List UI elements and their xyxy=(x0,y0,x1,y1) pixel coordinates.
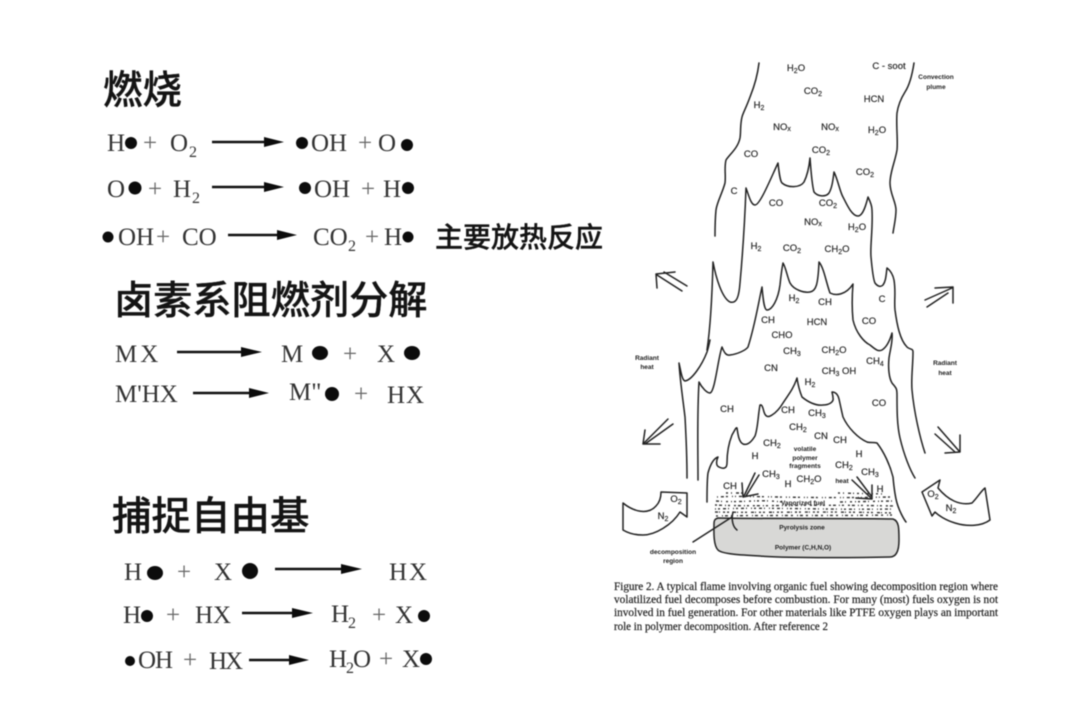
flame species labels: C - soot xyxy=(872,61,906,72)
flame species labels: H xyxy=(868,125,875,136)
heading: radical capture: 捕捉自由基 xyxy=(112,495,310,539)
equation: OH + CO: OH xyxy=(118,224,154,251)
flame species labels: 2 xyxy=(835,350,839,357)
flame annotations: Convection xyxy=(918,74,954,81)
figure caption: role in polymer decomposition. After reference 2 xyxy=(614,621,828,633)
flame species labels: 3 xyxy=(797,351,801,358)
flame species labels: HCN xyxy=(807,317,827,328)
flame species labels: CH xyxy=(762,469,776,480)
equation: MX xyxy=(115,341,420,368)
equation: H + HX: + xyxy=(166,602,180,629)
panel: radical capture xyxy=(112,495,432,677)
equation: OH + CO: H xyxy=(384,224,402,251)
flame species labels: 2 xyxy=(797,248,801,255)
flame species labels: CH xyxy=(808,408,822,419)
panel: halogen flame retardant decomposition xyxy=(114,280,428,409)
flame species labels: H xyxy=(785,479,792,490)
equation: M'HX: M" xyxy=(289,379,321,406)
equation: OH + HX xyxy=(125,646,432,677)
equation: OH + CO: 2 xyxy=(348,238,356,255)
equation: H + O2: + xyxy=(358,130,372,157)
flame annotations: polymer xyxy=(792,455,818,462)
flame annotations: 2 xyxy=(935,494,939,501)
equation: O + H2: + xyxy=(361,176,375,203)
flame species labels: NO xyxy=(804,217,818,228)
flame annotations: Radiant xyxy=(933,360,958,367)
equation: H + O2: + xyxy=(143,130,157,157)
equation: OH + HX: HX xyxy=(209,648,243,675)
flame species labels: 2 xyxy=(818,91,822,98)
flame species labels: 3 xyxy=(822,413,826,420)
flame annotations: Radiant xyxy=(635,355,660,362)
equation: MX: X xyxy=(377,341,395,368)
equation: OH + HX: X xyxy=(402,646,420,673)
flame species labels: 4 xyxy=(880,361,884,368)
flame species labels: CH xyxy=(833,435,847,446)
flame species labels: CO xyxy=(819,198,833,209)
flame species labels: CH xyxy=(822,366,835,377)
flame species labels: H xyxy=(789,293,795,304)
equation: OH + HX: OH xyxy=(138,647,173,674)
flame species labels: O xyxy=(842,244,850,255)
flame annotations: N xyxy=(946,503,952,514)
flame species labels: O xyxy=(839,345,847,356)
flame species labels: HCN xyxy=(864,94,884,105)
flame species labels: H xyxy=(856,449,863,460)
flame species labels: CO xyxy=(862,316,876,327)
flame species labels: H xyxy=(752,451,759,462)
flame species labels: 2 xyxy=(855,227,859,234)
flame species labels: CH xyxy=(824,244,838,255)
flame annotations: heat xyxy=(938,370,953,377)
equation: OH + HX: H xyxy=(329,646,347,673)
flame species labels: CO xyxy=(769,198,783,209)
flame annotations: plume xyxy=(926,84,946,91)
flame annotations: volatile xyxy=(794,446,817,453)
equation: O + H2: H xyxy=(173,176,191,203)
polymer block xyxy=(714,518,899,558)
flame species labels: CO xyxy=(783,243,797,254)
flame species labels: 2 xyxy=(760,105,764,112)
flame species labels: CH xyxy=(783,346,797,357)
flame species labels: 2 xyxy=(811,382,815,389)
equation: M'HX xyxy=(115,379,425,409)
heading: halogen decomposition: 卤素系阻燃剂分解 xyxy=(114,280,428,323)
flame species labels: 2 xyxy=(838,249,842,256)
panel: combustion xyxy=(102,69,603,255)
equation: H + HX: 2 xyxy=(348,615,356,632)
flame species labels: 2 xyxy=(803,427,807,434)
equation: OH + HX: 2 xyxy=(346,660,354,677)
flame species labels: 2 xyxy=(833,203,837,210)
equation: H + O2: 2 xyxy=(189,144,197,161)
flame annotations: heat xyxy=(640,364,655,371)
flame annotations: decomposition xyxy=(650,549,696,556)
flame species labels: H xyxy=(787,63,794,74)
flame species labels: CH xyxy=(835,460,849,471)
flame species labels: CO xyxy=(744,149,758,160)
equation: H + X: H xyxy=(124,559,142,586)
flame species labels: C xyxy=(731,186,738,197)
flame species labels: CH xyxy=(866,356,880,367)
flame species labels: CN xyxy=(814,431,828,442)
equation: OH + CO: + xyxy=(156,224,170,251)
flame species labels: x xyxy=(835,126,839,133)
flame annotations: Vaporized fuel xyxy=(781,500,825,507)
flame annotations xyxy=(635,74,958,565)
equation: H + HX: HX xyxy=(195,602,231,629)
flame species labels: O xyxy=(879,125,886,136)
equation: MX: M xyxy=(281,341,303,368)
equation: O + H2: 2 xyxy=(192,190,200,207)
equation: O + H2: H xyxy=(383,176,401,203)
flame annotations: O xyxy=(670,494,678,505)
equation: H + O2 xyxy=(107,130,413,161)
figure caption: involved in fuel generation. For other materials like PTFE oxygen plays an important xyxy=(614,607,999,619)
equation: OH + HX: + xyxy=(183,647,197,674)
flame species labels: CH xyxy=(789,422,803,433)
equation: M'HX: + xyxy=(354,381,368,408)
equation: H + O2: O xyxy=(378,130,396,157)
flame annotations: 2 xyxy=(664,516,668,523)
flame species labels: O xyxy=(814,474,822,485)
figure: flame diagram xyxy=(614,61,999,633)
note: main exothermic reaction: 主要放热反应 xyxy=(435,222,603,253)
equation: H + O2: H xyxy=(107,130,125,157)
arrows: radiant heat xyxy=(643,272,960,499)
equation: O + H2 xyxy=(107,176,414,207)
equation: O + H2: + xyxy=(148,176,162,203)
equation: H + X xyxy=(124,559,429,586)
flame species labels: CH xyxy=(818,297,832,308)
polymer block: Polymer (C,H,N,O) xyxy=(775,544,831,552)
flame species labels: 2 xyxy=(794,68,798,75)
equation: H + HX: X xyxy=(395,602,413,629)
flame annotations: N xyxy=(658,511,664,522)
flame species labels: 2 xyxy=(777,443,781,450)
flame species labels: 2 xyxy=(870,172,874,179)
equation: OH + CO xyxy=(102,224,414,255)
flame species labels: H xyxy=(877,484,884,495)
flame species labels: H xyxy=(754,100,760,111)
vaporized fuel speckle xyxy=(715,493,894,516)
equation: H + HX xyxy=(123,601,430,632)
equation: H + X: X xyxy=(214,559,232,586)
equation: H + HX: + xyxy=(372,602,386,629)
flame species labels: 2 xyxy=(795,298,799,305)
polymer block: Pyrolysis zone xyxy=(779,524,825,532)
equation: H + O2: O xyxy=(170,130,188,157)
flame species labels: 2 xyxy=(875,130,879,137)
equation: OH + CO: CO xyxy=(313,224,348,251)
flame species labels: CH xyxy=(723,481,737,492)
equation: H + X: HX xyxy=(389,559,429,586)
flame species labels: CO xyxy=(812,145,826,156)
flame species labels xyxy=(720,61,906,495)
flame annotations: 2 xyxy=(952,508,956,515)
flame species labels: OH xyxy=(839,366,856,377)
figure caption xyxy=(614,581,999,633)
flame species labels: H xyxy=(805,377,811,388)
equation: OH + HX: O xyxy=(353,646,371,673)
flame species labels: NO xyxy=(773,122,787,133)
flame species labels: CHO xyxy=(771,330,793,341)
flame species labels: NO xyxy=(821,122,835,133)
decomposition pointer xyxy=(693,512,737,542)
flame species labels: 3 xyxy=(875,472,879,479)
flame species labels: 2 xyxy=(810,479,814,486)
equation: M'HX: M'HX xyxy=(115,381,178,408)
equation: H + HX: H xyxy=(123,602,141,629)
flame species labels: 2 xyxy=(757,246,761,253)
equation: OH + CO: + xyxy=(365,224,379,251)
flame species labels: CH xyxy=(781,405,795,416)
flame species labels: CO xyxy=(804,86,818,97)
equation: MX: + xyxy=(343,341,357,368)
flame species labels: 2 xyxy=(849,465,853,472)
flame species labels: 2 xyxy=(826,150,830,157)
flame species labels: x xyxy=(787,126,791,133)
flame annotations: fragments xyxy=(789,463,821,470)
flame species labels: O xyxy=(798,63,805,74)
flame species labels: C xyxy=(879,294,886,305)
flame species labels: x xyxy=(818,221,822,228)
flame species labels: CH xyxy=(861,467,875,478)
equation: O + H2: O xyxy=(107,176,125,203)
equation: MX: MX xyxy=(115,341,161,368)
equation: M'HX: HX xyxy=(387,382,425,409)
flame species labels: CH xyxy=(796,474,810,485)
equation: OH + HX: + xyxy=(379,646,393,673)
flame species labels: CO xyxy=(856,167,870,178)
flame species labels: CH xyxy=(821,345,835,356)
flame species labels: H xyxy=(751,241,757,252)
flame species labels: 3 xyxy=(835,371,839,378)
flame species labels: 3 xyxy=(776,474,780,481)
flame species labels: CH xyxy=(761,315,775,326)
figure caption: volatilized fuel decomposes before combustion. For many (most) fuels oxygen is not xyxy=(614,594,999,606)
flame annotations: region xyxy=(663,558,683,565)
flame species labels: H xyxy=(848,222,855,233)
flame species labels: CO xyxy=(872,398,886,409)
flame species labels: CH xyxy=(763,438,777,449)
equation: O + H2: OH xyxy=(314,176,350,203)
equation: H + X: + xyxy=(177,559,191,586)
flame annotations: 2 xyxy=(678,499,682,506)
figure caption: Figure 2. A typical flame involving organic fuel showing decomposition region where xyxy=(614,581,998,593)
flame species labels: O xyxy=(859,222,866,233)
equation: H + HX: H xyxy=(331,601,349,628)
flame outlines xyxy=(679,63,925,522)
equation: OH + CO: CO xyxy=(182,224,217,251)
flame annotations: O xyxy=(927,489,935,500)
flame species labels: CN xyxy=(764,363,778,374)
flame annotations: heat xyxy=(835,478,850,485)
flame species labels: CH xyxy=(720,404,734,415)
arrows: air inflow xyxy=(623,480,990,535)
heading: combustion: 燃烧 xyxy=(103,69,182,113)
equation: H + O2: OH xyxy=(311,130,347,157)
